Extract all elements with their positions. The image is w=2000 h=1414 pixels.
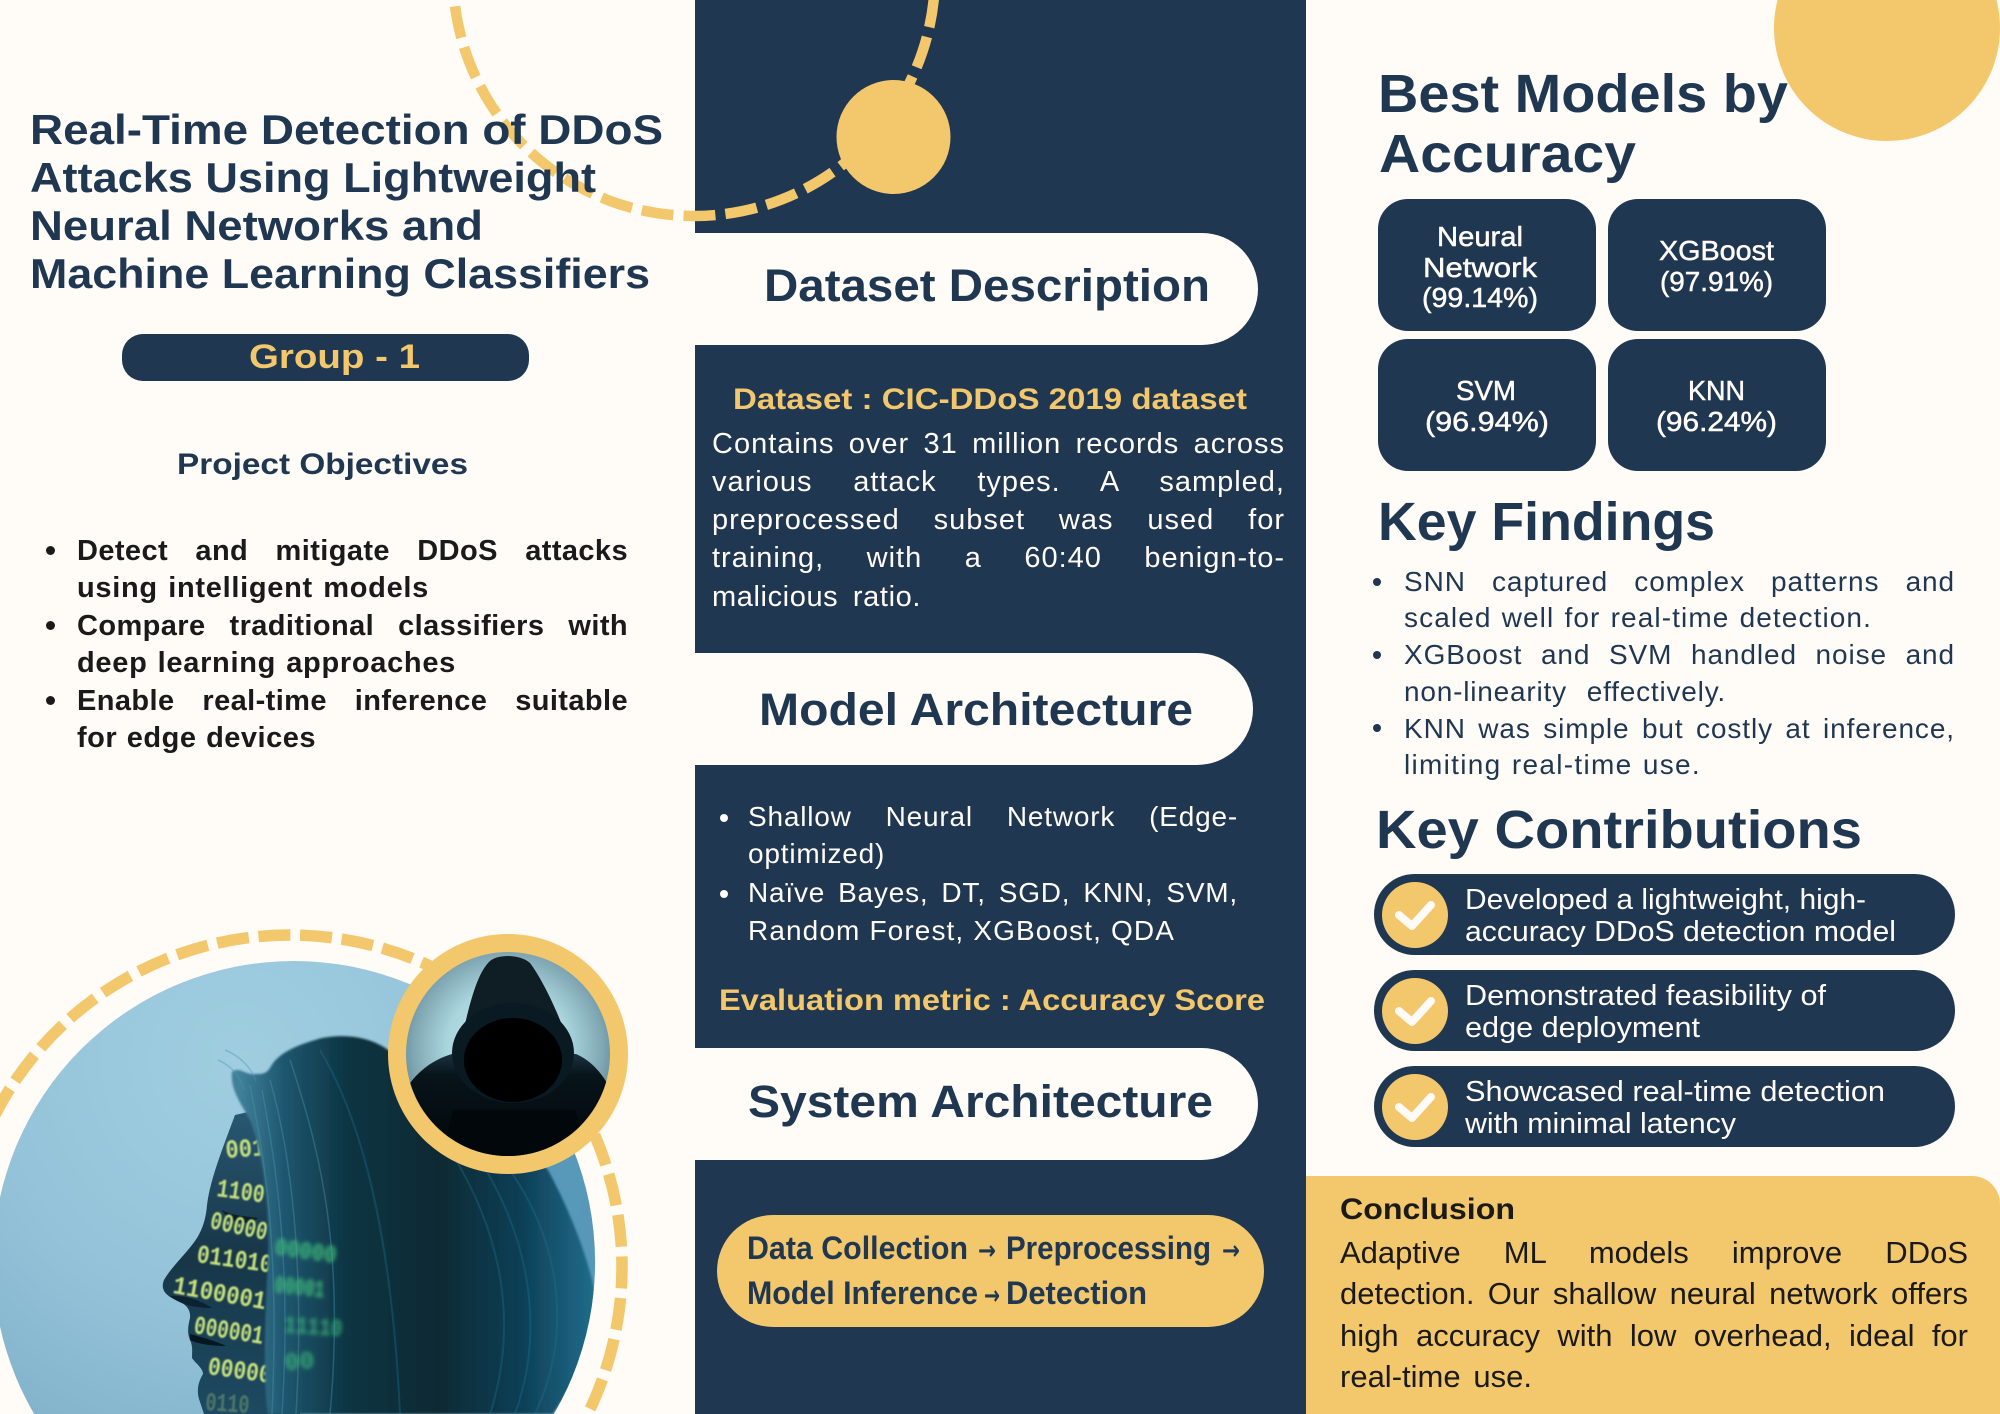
icon: yellow dot on arc [836,80,950,194]
text: conclusion body: real-time use. [1340,1359,1532,1394]
evaluation metric: Evaluation metric : Accuracy Score [719,984,1265,1017]
badge: group label: Group - 1 [249,338,420,376]
contribution 1: Developed a lightweight, high- [1465,884,1866,916]
text: project objectives bullets: using intelligent models [77,572,429,604]
text: conclusion body [1340,1235,1968,1394]
heading: best models by accuracy: Best Models by [1378,64,1788,124]
panel: conclusion background [1306,1176,2000,1414]
section header: system architecture: System Architecture [748,1076,1213,1127]
card: knn [1608,339,1826,471]
title: Attacks Using Lightweight [30,154,596,201]
card: knn: (96.24%) [1656,406,1777,437]
heading: conclusion: Conclusion [1340,1193,1515,1226]
section header: model architecture: Model Architecture [759,684,1193,735]
photo: face with binary projection: 00000 [207,1206,270,1248]
contribution 1: accuracy DDoS detection model [1465,916,1896,948]
photo: face with binary projection [0,955,610,1414]
contribution 2: Demonstrated feasibility of [1465,980,1827,1012]
text: key findings bullets: limiting real-time use. [1404,749,1701,780]
text: project objectives bullets: deep learning approaches [77,647,456,679]
card: knn: KNN [1688,375,1745,406]
dashed ring around photo [0,935,622,1414]
photo: hooded hacker in yellow ring [388,934,628,1174]
text: project objectives bullets: Enable real-time inference suitable [77,685,628,717]
dataset name: Dataset : CIC-DDoS 2019 dataset [733,383,1247,416]
photo: face with binary projection: 11110 [283,1313,343,1344]
card: neural network: Network [1423,252,1538,283]
photo: face with binary projection: 00000 [206,1352,273,1391]
heading: project objectives: Project Objectives [177,448,468,481]
card: xgboost [1608,199,1826,331]
text: key findings bullets: KNN was simple but costly at inference, [1404,713,1955,744]
panel: navy centre column [695,0,1306,1414]
photo: face with binary projection: 001 [224,1133,266,1166]
text: key findings bullets: SNN captured complex patterns and [1404,566,1955,597]
text: dataset description: various attack types. A sampled, [712,466,1285,498]
pipeline pill: → [1222,1236,1240,1266]
title: Machine Learning Classifiers [30,250,650,297]
decorative yellow circle top right [1774,0,2000,141]
text: conclusion body: Adaptive ML models improve DDoS [1340,1235,1968,1270]
dashed arc: top centre [453,0,935,216]
title [30,106,663,297]
text: dataset description: Contains over 31 million records across [712,428,1285,460]
pipeline pill: Model Inference [747,1275,978,1311]
heading: key contributions: Key Contributions [1376,800,1862,860]
text: project objectives bullets: for edge devices [77,722,316,754]
text: dataset description [712,428,1285,613]
text: key findings bullets: non-linearity effectively. [1404,676,1726,707]
card: neural network: (99.14%) [1422,282,1538,313]
text: dataset description: preprocessed subset was used for [712,504,1285,536]
pipeline pill: → [978,1236,996,1266]
text: model list: Naïve Bayes, DT, SGD, KNN, SVM, [748,877,1238,908]
text: project objectives bullets [46,535,628,754]
photo: face with binary projection: 00001 [273,1273,326,1305]
section header: system architecture [695,1048,1258,1160]
card: svm: SVM [1456,375,1516,406]
heading: best models by accuracy [1378,64,1788,184]
card: neural network: Neural [1437,221,1523,252]
text: model list [720,801,1238,946]
pipeline pill [717,1215,1264,1327]
text: dataset description: training, with a 60:40 benign-to- [712,542,1285,574]
text: dataset description: malicious ratio. [712,581,921,613]
text: model list: Random Forest, XGBoost, QDA [748,915,1175,946]
text: key findings bullets: XGBoost and SVM handled noise and [1404,639,1955,670]
heading: best models by accuracy: Accuracy [1379,124,1636,184]
title: Real-Time Detection of DDoS [30,106,663,153]
photo: face with binary projection: 011010 [195,1240,274,1280]
photo: face with binary projection: 000001 [192,1311,266,1352]
text: project objectives bullets: Compare traditional classifiers with [77,610,628,642]
text: conclusion body: detection. Our shallow neural network offers [1340,1276,1968,1311]
text: key findings bullets: scaled well for real-time detection. [1404,602,1872,633]
card: xgboost: XGBoost [1659,235,1774,266]
badge: group label [122,334,529,381]
photo: face with binary projection: 00000 [273,1235,338,1271]
photo: face with binary projection: 1100001 [171,1271,268,1317]
card: svm: (96.94%) [1425,406,1549,437]
card: xgboost: (97.91%) [1660,266,1773,297]
text: project objectives bullets: Detect and mitigate DDoS attacks [77,535,628,567]
heading: key findings: Key Findings [1378,492,1715,552]
text: model list: Shallow Neural Network (Edge- [748,801,1238,832]
text: model list: optimized) [748,838,885,869]
pipeline pill: Detection [1006,1275,1147,1311]
pipeline pill: → [984,1281,1000,1311]
photo: face with binary projection: 00 [283,1348,316,1378]
contribution 3: with minimal latency [1464,1108,1737,1140]
pipeline pill: Preprocessing [1006,1230,1211,1266]
text: key findings bullets [1373,566,1955,780]
contribution 3: Showcased real-time detection [1465,1076,1885,1108]
text: conclusion body: high accuracy with low overhead, ideal for [1340,1318,1968,1353]
contribution 2: edge deployment [1465,1012,1700,1044]
section header: dataset description: Dataset Description [764,260,1210,311]
contribution 3 [1374,1066,1955,1147]
card: svm [1378,339,1596,471]
title: Neural Networks and [30,202,483,249]
photo: face with binary projection: 1100 [215,1174,267,1211]
section header: model architecture [695,653,1253,765]
section header: dataset description [695,233,1258,345]
card: neural network [1378,199,1596,331]
contribution 2 [1374,970,1955,1051]
contribution 1 [1374,874,1955,955]
pipeline pill: Data Collection [747,1230,968,1266]
